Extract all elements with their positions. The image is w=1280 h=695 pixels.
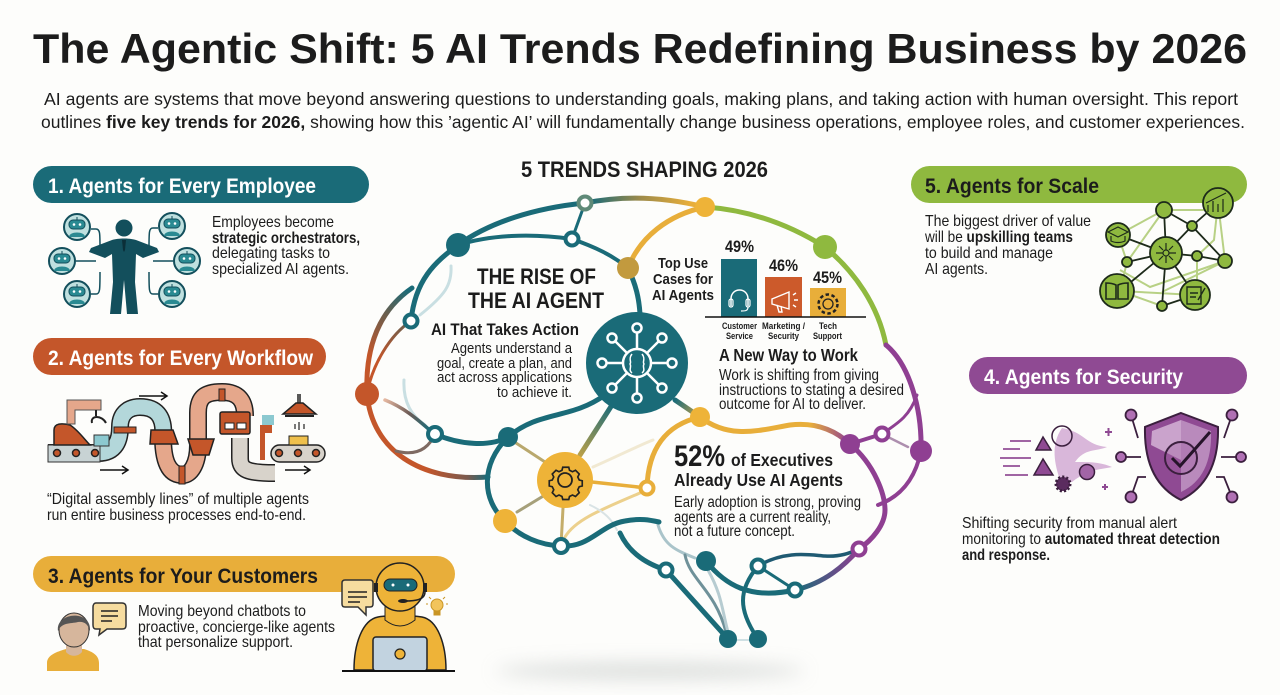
trend 2 heading: 2. Agents for Every Workflow (48, 347, 314, 370)
center heading: 5 TRENDS SHAPING 2026 (521, 157, 768, 182)
brain text: 52 percent stat: not a future concept. (674, 523, 795, 540)
intro paragraph: outlines five key trends for 2026, showing how this ’agentic AI’ will fundamentally change business operations, employee roles, and customer experiences. (41, 112, 1245, 132)
title: The Agentic Shift: 5 AI Trends Redefining Business by 2026 (33, 25, 1247, 72)
brain text: the rise of the AI agent: THE RISE OF (477, 264, 596, 289)
chart title (652, 255, 714, 304)
icon: upskilling network (1100, 188, 1233, 311)
brain text: 52 percent stat: Already Use AI Agents (674, 470, 843, 490)
icon: security shield (1000, 410, 1246, 502)
icon: customer with speech bubble (47, 603, 126, 671)
ring nodes (404, 196, 888, 596)
trend 3 heading (33, 556, 455, 592)
icon: support robot with laptop (342, 563, 455, 671)
intro paragraph (41, 89, 1245, 132)
trend 5 text: The biggest driver of value (925, 213, 1091, 230)
brain text: the rise of the AI agent: Agents understand a (451, 340, 573, 357)
brain text: a new way to work: outcome for AI to deliver. (719, 396, 866, 413)
axis labels: Security (768, 331, 799, 341)
panel: trend 5 (911, 166, 1247, 311)
chart title: AI Agents (652, 287, 714, 304)
axis labels: Service (726, 331, 753, 341)
brain text: 52 percent stat: agents are a current reality, (674, 509, 831, 526)
brain text: a new way to work: instructions to stating a desired (719, 382, 904, 399)
bar: customer service: 49% (725, 238, 754, 256)
trend 2 heading (33, 338, 326, 375)
trend 1 heading: 1. Agents for Every Employee (48, 175, 316, 198)
panel: trend 2 (33, 338, 326, 524)
icon: employee orchestrating robots (49, 213, 200, 314)
trend 3 text: that personalize support. (138, 634, 293, 651)
axis labels: Support (813, 331, 842, 341)
bar: tech support: 45% (813, 269, 842, 287)
bar: marketing and security (765, 257, 802, 317)
brain text: the rise of the AI agent: THE AI AGENT (468, 288, 604, 313)
icon: gear hub (537, 452, 593, 508)
brain text: 52 percent stat: 52% (674, 440, 725, 473)
brain text: 52 percent stat: Early adoption is strong, proving (674, 494, 861, 511)
bar: customer service (721, 238, 757, 317)
chart title: Top Use (658, 255, 708, 272)
trend 1 text: strategic orchestrators, (212, 230, 360, 247)
trend 2 text (47, 491, 309, 524)
panel: trend 4 (962, 357, 1247, 564)
trend 1 text: delegating tasks to (212, 245, 330, 262)
chart title: Cases for (653, 271, 713, 288)
brain text: a new way to work (719, 345, 904, 413)
trend 5 text: AI agents. (925, 261, 988, 278)
bar: marketing and security: 46% (769, 257, 798, 275)
brain text: the rise of the AI agent: goal, create a plan, and (437, 355, 572, 372)
brain text: a new way to work: A New Way to Work (719, 345, 858, 365)
trend 2 text: “Digital assembly lines” of multiple agents (47, 491, 309, 508)
trend 4 text (962, 515, 1220, 564)
trend 1 text: specialized AI agents. (212, 261, 349, 278)
trend 4 text: monitoring to automated threat detection (962, 531, 1220, 548)
brain text: the rise of the AI agent: AI That Takes Action (431, 320, 579, 339)
trend 5 heading (911, 166, 1247, 203)
solid nodes (355, 197, 932, 648)
brain text: the rise of the AI agent: to achieve it. (497, 384, 572, 401)
trend 2 text: run entire business processes end-to-end. (47, 507, 306, 524)
trend 5 text: to build and manage (925, 245, 1053, 262)
axis labels: Customer (722, 321, 757, 331)
intro paragraph: AI agents are systems that move beyond answering questions to understanding goals, making plans, and taking action with human oversight. This report (44, 89, 1238, 109)
brain text: the rise of the AI agent (431, 264, 604, 401)
trend 5 text: will be upskilling teams (924, 229, 1073, 246)
brain text: a new way to work: Work is shifting from giving (719, 367, 879, 384)
trend 1 text (212, 214, 360, 278)
brain network diagram (355, 196, 932, 648)
icon: central AI hub (586, 312, 688, 414)
trend 4 heading: 4. Agents for Security (984, 366, 1183, 389)
brain text: 52 percent stat (674, 440, 861, 540)
trend 5 heading: 5. Agents for Scale (925, 175, 1099, 198)
axis labels: Tech (819, 321, 837, 331)
trend 1 heading (33, 166, 369, 203)
axis labels (722, 321, 842, 341)
bar chart: top use cases (652, 238, 866, 341)
brain text: 52 percent stat: of Executives (731, 450, 833, 470)
trend 4 heading (969, 357, 1247, 394)
trend 4 text: and response. (962, 547, 1050, 564)
panel: trend 1 (33, 166, 369, 314)
floor shadow (495, 663, 805, 679)
trend 4 text: Shifting security from manual alert (962, 515, 1177, 532)
trend 3 heading: 3. Agents for Your Customers (48, 565, 318, 588)
trend 5 text (924, 213, 1091, 278)
trend 3 text: Moving beyond chatbots to (138, 603, 306, 620)
icon: digital assembly line (48, 389, 325, 484)
bar: tech support (810, 269, 846, 317)
trend 1 text: Employees become (212, 214, 334, 231)
brain text: the rise of the AI agent: act across applications (437, 369, 572, 386)
trend 3 text: proactive, concierge-like agents (138, 619, 335, 636)
panel: trend 3 (33, 556, 455, 671)
trend 3 text (138, 603, 335, 651)
axis labels: Marketing / (762, 321, 805, 331)
